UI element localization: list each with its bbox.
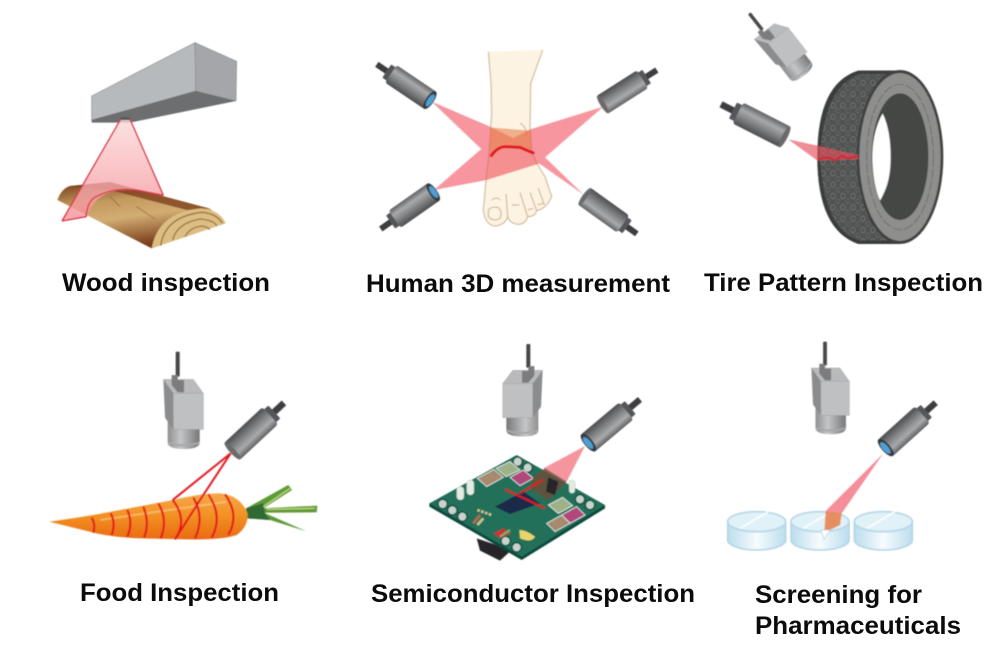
laser line on ankle: [491, 147, 534, 157]
illustration: foot with four laser sensors: [371, 50, 662, 242]
tablets: [728, 512, 912, 550]
panel: food inspection: [49, 352, 317, 607]
icon: sensor bottom left: [375, 181, 442, 238]
heading: screening for pharmaceuticals: Pharmaceuticals: [755, 612, 961, 640]
panel: wood inspection: [57, 43, 270, 297]
illustration: tire with camera and sensor: [716, 0, 943, 244]
icon: sensor top left: [371, 56, 439, 111]
illustration: laser bar over wood log: [57, 43, 237, 248]
illuminated component: [505, 468, 567, 508]
heading: food inspection: Food Inspection: [80, 579, 279, 607]
heading: screening for pharmaceuticals: Screening for: [755, 581, 922, 609]
laser beam: [821, 453, 883, 539]
laser beams: [432, 102, 603, 195]
laser fan: [62, 117, 163, 221]
icon: sensor: [716, 94, 792, 149]
panel: screening for pharmaceuticals: [728, 342, 961, 640]
panel: semiconductor inspection: [371, 344, 695, 608]
panel: human 3D measurement: [366, 50, 671, 298]
heading: wood inspection: Wood inspection: [62, 269, 270, 297]
icon: camera: [163, 352, 203, 449]
icon: camera: [740, 0, 817, 86]
foot: [483, 50, 552, 226]
illustration: pills with camera and sensor: [728, 342, 943, 550]
panel: tire pattern inspection: [704, 0, 983, 297]
heading: semiconductor inspection: Semiconductor Inspection: [371, 580, 695, 608]
icon: sensor bottom right: [577, 187, 643, 242]
laser beam on tire: [788, 139, 858, 161]
icon: sensor top right: [595, 61, 662, 115]
heading: human 3D measurement: Human 3D measurement: [366, 270, 671, 298]
carrot body: [49, 493, 248, 539]
icon: grey laser housing: [92, 43, 237, 123]
carrot leaves: [246, 485, 317, 531]
icon: sensor: [578, 391, 647, 454]
tire: [817, 70, 943, 244]
laser lines: [92, 453, 233, 539]
circuit board: [429, 455, 605, 561]
illustration: carrot with camera and sensor: [49, 352, 317, 539]
icon: camera: [503, 344, 543, 436]
icon: sensor: [223, 394, 292, 461]
icon: camera: [811, 342, 849, 434]
laser beam: [543, 446, 585, 482]
heading: screening for pharmaceuticals: [755, 581, 961, 640]
heading: tire pattern inspection: Tire Pattern Inspection: [704, 269, 983, 297]
wood log: [57, 182, 226, 248]
laser overlap on ankle: [490, 127, 532, 157]
illustration: circuit board with camera and sensor: [429, 344, 647, 561]
icon: sensor: [875, 394, 943, 459]
